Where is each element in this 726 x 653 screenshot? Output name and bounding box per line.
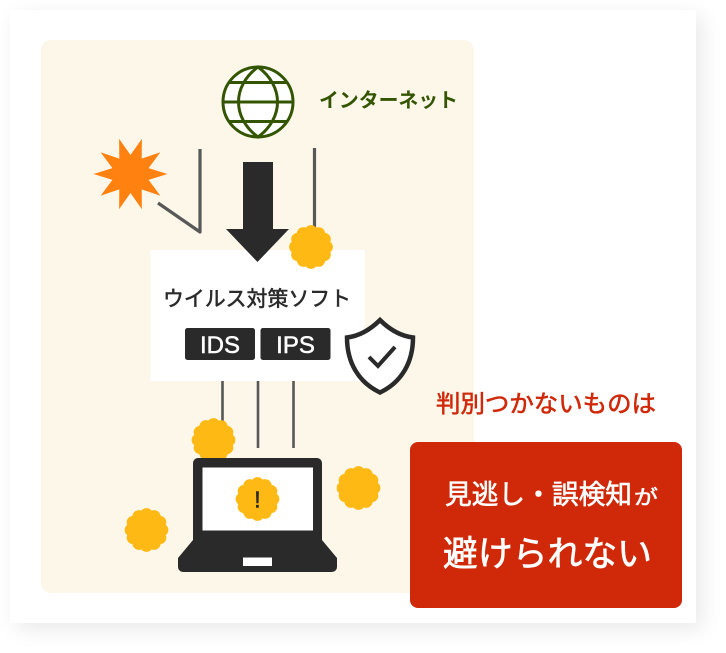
callout lead text: 判別つかないものは: [436, 391, 656, 418]
tag: IDS: [185, 328, 255, 360]
virus badge: on laptop screen with warning: [236, 477, 279, 521]
tag: IPS: IPS: [276, 332, 315, 359]
icon: globe: [223, 67, 293, 137]
callout: unavoidable misses: が: [634, 486, 658, 509]
tag: IPS: [260, 328, 330, 360]
virus badge: above laptop: [192, 418, 235, 462]
virus badge: right of laptop: [337, 466, 380, 510]
panel: antivirus software box: [150, 250, 365, 381]
deflected threat line: [158, 149, 200, 232]
icon: laptop: [178, 458, 337, 572]
virus badge: on laptop screen with warning: !: [254, 486, 261, 512]
callout: unavoidable misses: [410, 442, 682, 608]
virus badge: on right line: [289, 225, 333, 269]
filtered traffic lines: [222, 381, 294, 448]
tag: IDS: IDS: [200, 332, 240, 359]
arrow: downward traffic: [226, 162, 289, 262]
icon: explosion: [94, 139, 168, 209]
label: internet: インターネット: [319, 89, 458, 112]
callout: unavoidable misses: 見逃し・誤検知: [445, 480, 632, 510]
panel: network background: [41, 40, 474, 593]
callout: unavoidable misses: 避けられない: [443, 535, 652, 574]
heading: antivirus software: ウイルス対策ソフト: [163, 288, 351, 311]
passing threat line: [313, 148, 316, 230]
icon: shield with check: [347, 320, 413, 392]
virus badge: left of laptop: [125, 508, 168, 552]
